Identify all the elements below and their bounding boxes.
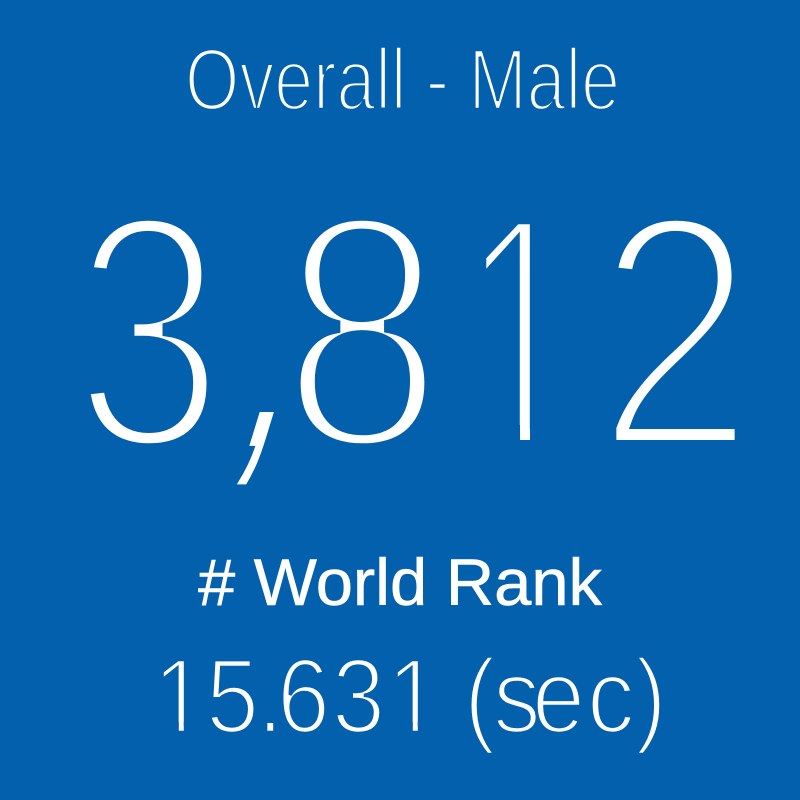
title: Overall - Male [185,32,620,128]
main number: , [217,173,359,509]
main number: 8 [282,145,443,518]
main number: 3 [74,145,224,518]
main number: 1 [461,145,581,518]
main number [74,145,755,518]
metric label: # World Rank [198,545,603,619]
metric value: 15.631 (sec) [153,638,667,756]
main number: 2 [596,145,755,518]
